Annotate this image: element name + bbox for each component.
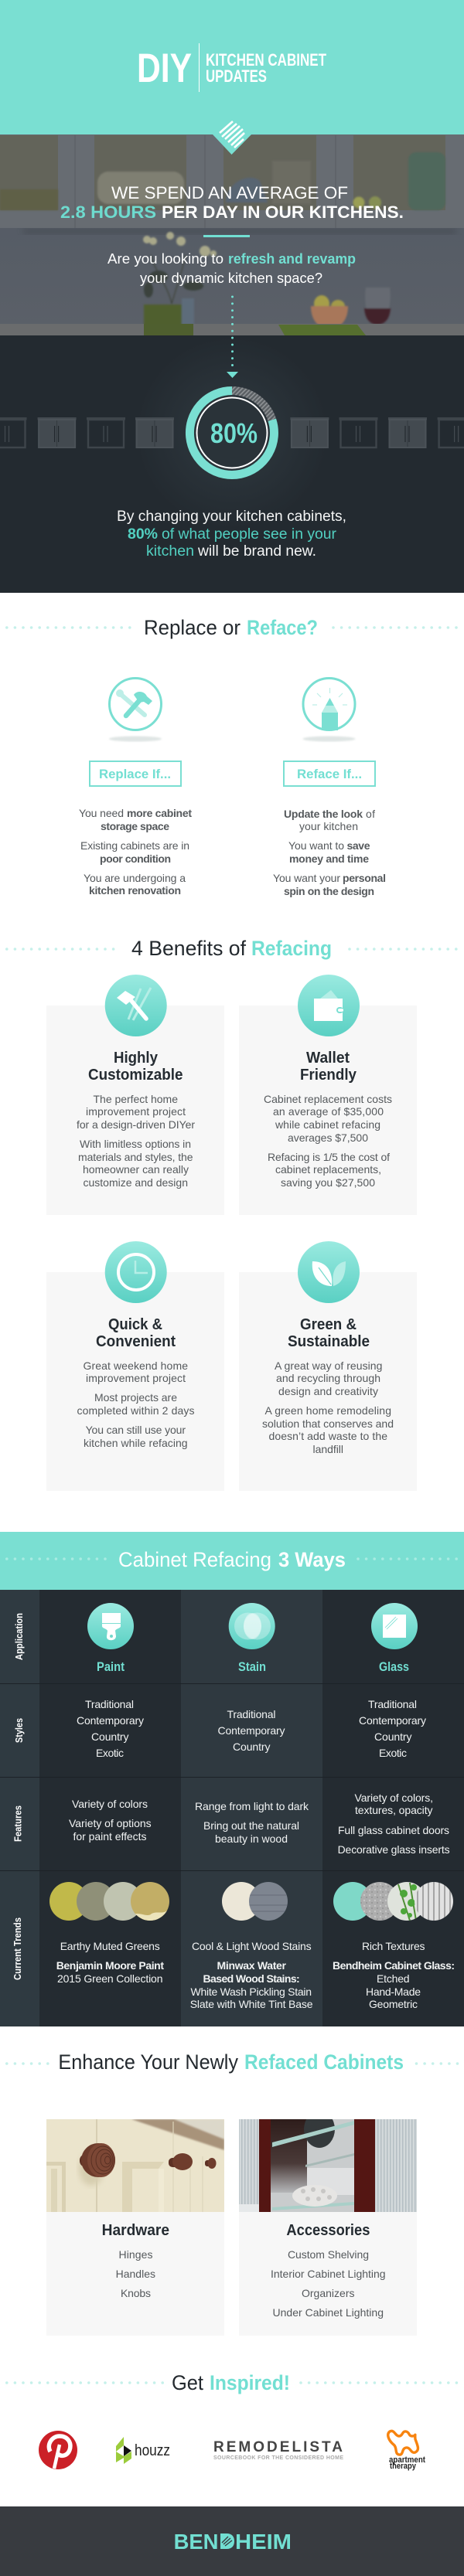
text block: statistic description [117, 509, 346, 560]
features list: Variety of options [69, 1817, 152, 1829]
text block: reface reasons: money and time [289, 852, 369, 865]
button: Replace If: Replace If... [99, 767, 171, 781]
logo: Bendheim: BEN [174, 2530, 218, 2554]
icon: glass pane [371, 1603, 418, 1649]
hardware list: Knobs [121, 2287, 151, 2299]
accessories list: Interior Cabinet Lighting [271, 2268, 386, 2280]
button: Reface If: Reface If... [297, 767, 362, 781]
card title: Wallet [306, 1050, 350, 1067]
heading: Replace or Reface [7, 616, 460, 639]
row labels: Features [12, 1805, 23, 1842]
accessories list: Organizers [302, 2287, 354, 2299]
trends text: Based Wood Stains: [203, 1972, 300, 1985]
label: Paint: Paint [97, 1659, 125, 1674]
styles list: Country [233, 1741, 271, 1753]
heading: 4 Benefits of Refacing [7, 937, 460, 960]
hardware list: Handles [116, 2268, 155, 2280]
hardware list [116, 2248, 155, 2299]
swatches: glass textures [333, 1882, 453, 1921]
text block: reface reasons: spin on the design [284, 885, 374, 897]
card text [77, 1093, 195, 1189]
subtitle: KITCHEN CABINET [206, 50, 326, 70]
text block: reface reasons: save [346, 839, 370, 852]
text block: reface reasons: your kitchen [299, 820, 358, 832]
card text: solution that conserves and [262, 1417, 394, 1430]
card text: Great weekend home [84, 1359, 188, 1372]
card text [264, 1093, 392, 1189]
features list: textures, opacity [355, 1804, 433, 1816]
card text: With limitless options in [80, 1138, 191, 1150]
logo: Remodelista: REMODELISTA [213, 2439, 343, 2455]
heading: Get Inspired [7, 2371, 460, 2394]
trends text: Etched [377, 1972, 410, 1985]
card text: materials and styles, the [78, 1151, 193, 1163]
logo: Apartment Therapy: apartment [389, 2455, 425, 2465]
heading: Get Inspired: Inspired! [210, 2371, 290, 2394]
trends text [333, 1940, 455, 2010]
swatches: wood stains [222, 1882, 288, 1921]
button: Reface If [284, 761, 375, 786]
features list: Variety of colors [72, 1798, 148, 1810]
panel: Quick and Convenient [46, 1241, 224, 1491]
swatches: muted greens [49, 1882, 169, 1924]
divider bar [203, 235, 250, 237]
panel: teal 3 Ways heading band [0, 1532, 464, 1590]
accessories list [271, 2248, 386, 2319]
row labels: Current Trends [12, 1918, 23, 1980]
card title [300, 1050, 357, 1084]
card text: design and creativity [278, 1385, 378, 1397]
panel: Hardware [46, 2119, 224, 2297]
card text: You can still use your [86, 1424, 186, 1436]
icon: paint brush [87, 1603, 134, 1649]
heading: Get Inspired: Get [172, 2371, 203, 2394]
heading: Enhance Your Newly Refaced Cabinets: Refaced Cabinets [244, 2050, 404, 2074]
panel: Accessories [239, 2119, 417, 2319]
text block: statistic description: 80% [128, 526, 158, 543]
text block: statistic description: By changing your kitchen cabinets, [117, 509, 346, 525]
label: Stain: Stain [238, 1659, 266, 1674]
row labels: Styles [13, 1718, 25, 1743]
card text: homeowner can really [83, 1163, 189, 1176]
panel: footer [0, 2506, 464, 2576]
text block: hero question: Are you looking to [107, 251, 223, 267]
panel: dark statistic section [0, 335, 464, 593]
icon: pencil [303, 679, 356, 742]
trends text: Earthy Muted Greens [60, 1940, 160, 1952]
trends text: Cool & Light Wood Stains [192, 1940, 312, 1952]
card text: improvement project [86, 1105, 186, 1118]
text block: reface reasons [273, 808, 386, 897]
icon: wallet [298, 975, 360, 1036]
features list: for paint effects [73, 1830, 147, 1843]
card title: Highly [114, 1050, 159, 1067]
heading: Replace or Reface: Reface? [247, 616, 318, 639]
logo: Houzz [116, 2437, 170, 2464]
card text: The perfect home [93, 1093, 178, 1105]
card text: completed within 2 days [77, 1404, 195, 1417]
text block: replace reasons: Existing cabinets are in [80, 839, 189, 852]
styles list: Exotic [96, 1747, 124, 1759]
heading: Enhance Your Newly Refaced Cabinets: Enhance Your Newly [58, 2050, 238, 2074]
card title: Convenient [96, 1333, 176, 1350]
icon: hammer and wrench [109, 679, 162, 742]
panel: Highly Customizable [46, 975, 224, 1215]
logo: Apartment Therapy: therapy [390, 2462, 417, 2471]
trends text: Rich Textures [362, 1940, 425, 1952]
card text [262, 1359, 394, 1455]
card text: Cabinet replacement costs [264, 1093, 392, 1105]
logo: Apartment Therapy [388, 2431, 425, 2471]
styles list [218, 1708, 285, 1753]
text block: reface reasons: Update the look [284, 808, 363, 820]
text block: hero headline [60, 183, 404, 222]
card text: an average of $35,000 [273, 1105, 384, 1118]
features list: Range from light to dark [195, 1800, 309, 1812]
text block: replace reasons: kitchen renovation [89, 884, 181, 897]
trends text: White Wash Pickling Stain [190, 1986, 312, 1998]
card title: Friendly [300, 1067, 357, 1084]
text block: hero headline: PER DAY IN OUR KITCHENS. [162, 202, 404, 222]
text block: hero question: refresh and revamp [228, 251, 356, 267]
icon: hammer and brushes [105, 975, 167, 1036]
row labels: Application [13, 1613, 25, 1660]
text block: replace reasons: storage space [101, 820, 169, 832]
heading: 4 Benefits of Refacing: Refacing [251, 937, 332, 960]
card title [288, 1316, 370, 1350]
trends text [190, 1940, 313, 2010]
trends text: Hand-Made [366, 1986, 421, 1998]
card text: saving you $27,500 [281, 1176, 375, 1189]
column: Stain [190, 1603, 313, 2010]
features list [195, 1800, 309, 1845]
trends text: Slate with White Tint Base [190, 1998, 313, 2010]
card text: and recycling through [276, 1372, 380, 1384]
logo: Remodelista: SOURCEBOOK FOR THE CONSIDERED HOME [213, 2455, 343, 2461]
features list: beauty in wood [215, 1832, 288, 1845]
logo: Bendheim [174, 2530, 292, 2554]
card text: A green home remodeling [264, 1404, 391, 1417]
styles list: Traditional [85, 1698, 134, 1710]
panel: Green and Sustainable [239, 1241, 417, 1491]
features list: Full glass cabinet doors [338, 1824, 449, 1836]
text block: replace reasons: You are undergoing a [84, 872, 186, 884]
subtitle [206, 50, 326, 86]
chart: 80% donut [189, 390, 274, 475]
text block: reface reasons: personal [343, 872, 386, 884]
panel: comparison table background [0, 1590, 464, 2026]
features list: Bring out the natural [203, 1819, 299, 1832]
styles list: Country [374, 1730, 411, 1743]
photo: glass shelves [239, 2111, 417, 2212]
text block: replace reasons: You need [79, 807, 124, 819]
text block: hero headline: WE SPEND AN AVERAGE OF [111, 183, 348, 202]
styles list: Traditional [368, 1698, 417, 1710]
text block: replace reasons: more cabinet [127, 807, 192, 819]
trends text: Minwax Water [217, 1959, 287, 1972]
accessories list: Under Cabinet Lighting [272, 2306, 384, 2319]
row labels [12, 1613, 25, 1980]
styles list: Traditional [227, 1708, 275, 1720]
text block: hero question: your dynamic kitchen space? [140, 271, 322, 286]
card title: Hardware [102, 2222, 169, 2239]
panel: teal 3 Ways heading band: 3 Ways [278, 1548, 346, 1571]
column: Paint [49, 1603, 169, 1985]
text block: hero headline: 2.8 HOURS [60, 202, 156, 222]
trends text: Geometric [369, 1998, 418, 2010]
card text: averages $7,500 [288, 1131, 368, 1144]
panel: teal 3 Ways heading band: Cabinet Refacing [118, 1548, 271, 1571]
card text: Most projects are [94, 1391, 177, 1404]
heading: 4 Benefits of Refacing: 4 Benefits of [131, 937, 246, 960]
styles list: Contemporary [77, 1714, 144, 1727]
panel: Wallet Friendly [239, 975, 417, 1215]
card text [77, 1359, 195, 1449]
text block: replace reasons [79, 807, 192, 897]
styles list: Country [91, 1730, 128, 1743]
trends text [56, 1940, 164, 1985]
card text: doesn’t add waste to the [269, 1430, 387, 1442]
trends text: Bendheim Cabinet Glass: [333, 1959, 455, 1972]
text block: reface reasons: of [366, 808, 375, 820]
subtitle: UPDATES [206, 66, 267, 86]
styles list: Contemporary [218, 1724, 285, 1737]
photo: cabinet knobs [46, 2119, 224, 2212]
styles list [359, 1698, 426, 1759]
card text: landfill [312, 1443, 343, 1455]
panel: reface column [273, 679, 386, 897]
card text: customize and design [84, 1176, 188, 1189]
styles list: Contemporary [359, 1714, 426, 1727]
arrow: dotted connector [227, 297, 238, 378]
button: Replace If [90, 761, 181, 786]
card title: Quick & [108, 1316, 162, 1333]
title: DIY: DIY [137, 46, 192, 91]
logo: Bendheim: HEIM [235, 2530, 292, 2554]
text block: statistic description: kitchen [146, 543, 194, 560]
card text: A great way of reusing [275, 1359, 382, 1372]
label: Glass: Glass [379, 1659, 409, 1674]
trends text: 2015 Green Collection [57, 1972, 162, 1985]
card text: Refacing is 1/5 the cost of [268, 1151, 390, 1163]
card title [88, 1050, 183, 1084]
icon: overlapping stain circles [229, 1603, 275, 1649]
icon: header notch with striped diamond logo [213, 121, 251, 155]
features list [69, 1798, 152, 1843]
features list: Variety of colors, [354, 1792, 433, 1804]
row of cabinet icons [0, 417, 464, 447]
card title: Customizable [88, 1067, 183, 1084]
icon: clock [105, 1241, 167, 1303]
card title: Accessories [286, 2222, 370, 2239]
accessories list: Custom Shelving [288, 2248, 369, 2261]
text block: replace reasons: poor condition [100, 852, 171, 865]
logo: Houzz: houzz [135, 2442, 170, 2459]
logo: Pinterest [39, 2431, 77, 2469]
card title: Sustainable [288, 1333, 370, 1350]
styles list: Exotic [379, 1747, 407, 1759]
styles list [77, 1698, 144, 1759]
card text: improvement project [86, 1372, 186, 1384]
donut value: 80% [210, 417, 258, 449]
text block: statistic description: of what people see in your [162, 526, 337, 543]
card title: Green & [300, 1316, 357, 1333]
card text: kitchen while refacing [84, 1437, 188, 1449]
hardware list: Hinges [119, 2248, 153, 2261]
card text: while cabinet refacing [275, 1118, 380, 1131]
panel: hero kitchen photo [0, 134, 464, 335]
text block: reface reasons: You want to [288, 839, 344, 852]
text block: reface reasons: You want your [273, 872, 340, 884]
card title [96, 1316, 176, 1350]
icon: leaves [298, 1241, 360, 1303]
heading: Enhance Your Newly Refaced Cabinets [7, 2050, 460, 2074]
divider line [199, 43, 200, 92]
heading: Replace or Reface: Replace or [144, 616, 241, 639]
panel: teal header [0, 0, 464, 134]
text block: statistic description: will be brand new. [197, 543, 316, 560]
card text: for a design-driven DIYer [77, 1118, 195, 1131]
features list: Decorative glass inserts [338, 1843, 450, 1856]
trends text: Benjamin Moore Paint [56, 1959, 164, 1972]
features list [338, 1792, 450, 1856]
panel: replace column [79, 679, 192, 897]
column: Glass [333, 1603, 455, 2010]
card text: cabinet replacements, [275, 1163, 381, 1176]
text block: hero question [107, 251, 356, 286]
